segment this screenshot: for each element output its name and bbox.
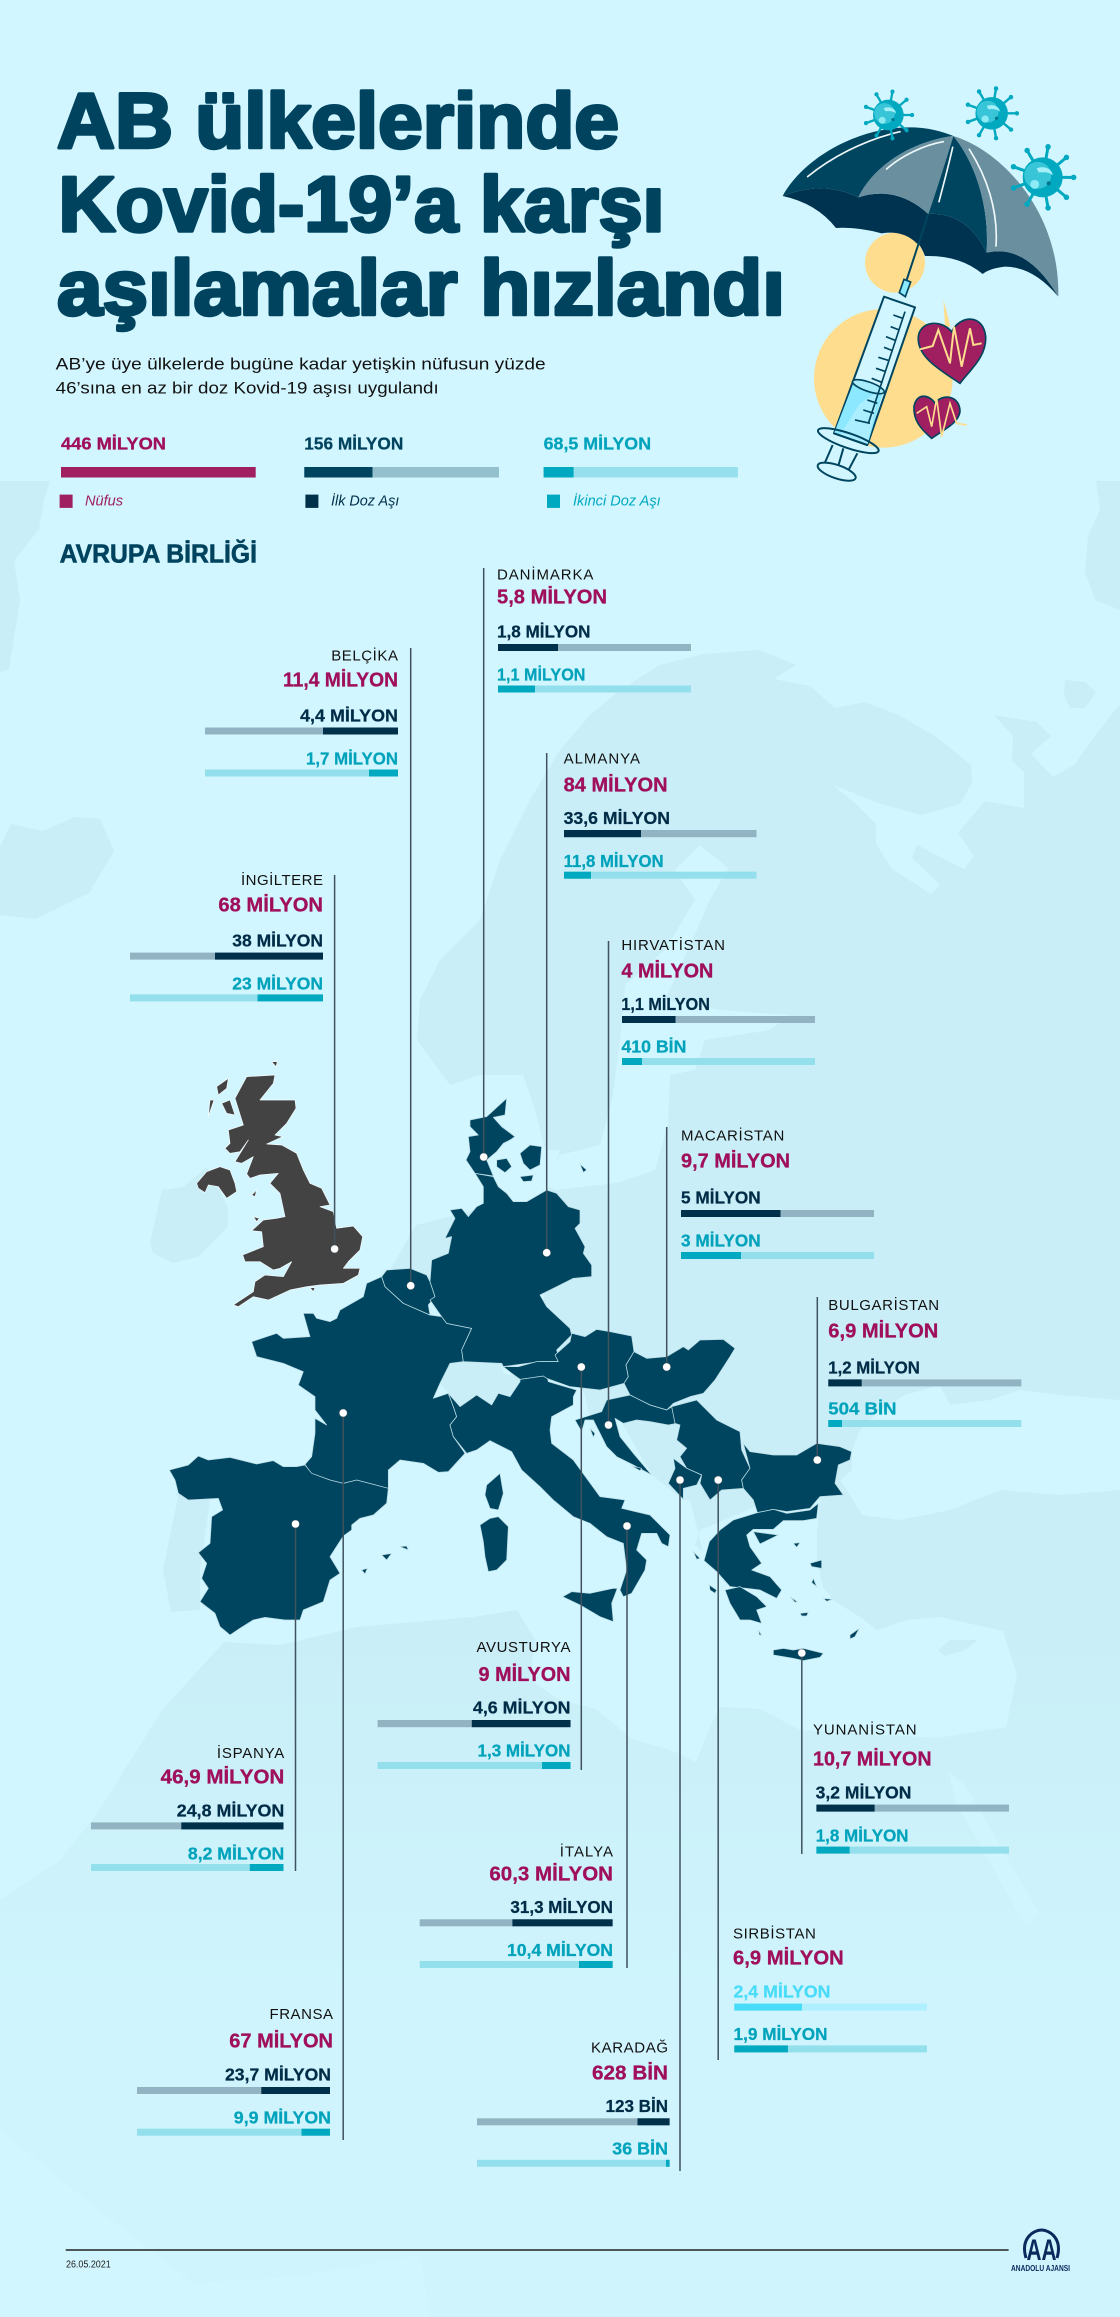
title: Kovid-19’a karşı [58,160,664,248]
population: 9,7 MİLYON [681,1149,790,1172]
panel: ingiltere [130,871,339,1253]
second dose [621,1036,815,1065]
second dose [420,1940,613,1968]
second dose: 504 BİN [828,1398,897,1418]
first dose: 4,4 MİLYON [300,706,398,726]
map: croatia [575,1395,677,1475]
first dose [681,1188,874,1217]
icon: small heart [914,396,967,438]
second dose: 8,2 MİLYON [188,1843,284,1863]
second dose [91,1843,284,1871]
country name: İSPANYA [217,1744,284,1762]
population: 84 MİLYON [564,774,668,796]
country name: ALMANYA [564,750,640,768]
icon: large heart [918,299,986,383]
population: 4 MİLYON [621,959,713,982]
second dose: 36 BİN [612,2139,668,2159]
map: hungary [624,1339,735,1410]
second dose [828,1398,1021,1427]
second dose: 1,7 MİLYON [306,748,398,768]
summary: nüfus [60,434,256,510]
second dose: 410 BİN [621,1036,686,1056]
country name: DANİMARKA [497,566,593,584]
second dose [137,2107,331,2136]
map: serbia [672,1400,750,1500]
second dose: 3 MİLYON [681,1230,761,1250]
second dose [497,664,691,692]
map: greece [693,1503,859,1661]
icon: umbrella [783,127,1058,297]
summary: ikinci doz [544,434,738,510]
second dose: 9,9 MİLYON [234,2107,331,2127]
first dose: 1,1 MİLYON [621,994,710,1014]
population: 6,9 MİLYON [733,1947,844,1970]
population: 10,7 MİLYON [813,1748,932,1771]
first dose: 3,2 MİLYON [816,1782,911,1802]
first dose [621,994,815,1023]
map: germany [430,1173,592,1367]
first dose: 38 MİLYON [232,930,323,950]
logo: anadolu ajansı: ANADOLU AJANSI [1011,2264,1070,2273]
first dose: 24,8 MİLYON [177,1800,284,1820]
subtitle text: 46’sına en az bir doz Kovid-19 aşısı uygulandı [56,378,439,398]
population: 68 MİLYON [218,893,323,916]
summary: ilk doz: İlk Doz Aşı [331,492,399,510]
population: 9 MİLYON [478,1663,570,1686]
second dose [681,1230,874,1259]
second dose: 1,9 MİLYON [734,2024,828,2044]
logo: anadolu ajansı: AA [1026,2234,1056,2267]
second dose [205,748,398,776]
summary: ilk doz [304,434,499,510]
panel: sırbistan [714,1476,927,2060]
panel: karadağ [477,1476,684,2171]
country name: KARADAĞ [591,2040,668,2056]
first dose: 23,7 MİLYON [225,2064,331,2084]
first dose [137,2064,331,2094]
second dose: 1,3 MİLYON [478,1740,570,1760]
second dose [816,1825,1009,1854]
country name: İNGİLTERE [241,871,323,889]
second dose: 1,1 MİLYON [497,664,586,684]
second dose [477,2139,670,2167]
first dose: 123 BİN [606,2096,668,2116]
icon: virus 2 [966,86,1019,140]
title: aşılamalar hızlandı [57,244,785,332]
first dose: 4,6 MİLYON [473,1697,570,1717]
second dose [734,2024,927,2052]
subtitle text: AB’ye üye ülkelerde bugüne kadar yetişkin nüfusun yüzde [56,354,546,374]
population: 67 MİLYON [229,2029,333,2052]
second dose: 10,4 MİLYON [507,1940,613,1960]
first dose [130,930,323,960]
background map: pale world land [0,481,1120,2317]
heading: avrupa birliği: AVRUPA BİRLİĞİ [60,538,257,568]
panel: danimarka [480,566,691,1161]
title [57,76,785,332]
first dose: 1,8 MİLYON [497,622,590,642]
panel: belçika [205,646,415,1290]
first dose: 2,4 MİLYON [734,1981,830,2001]
map: austria [503,1329,634,1390]
panel: ispanya [91,1520,300,1871]
first dose [497,622,691,651]
population: 5,8 MİLYON [497,586,607,608]
first dose: 31,3 MİLYON [510,1897,613,1917]
population: 46,9 MİLYON [161,1765,284,1788]
population: 6,9 MİLYON [828,1319,938,1342]
summary: ikinci doz: 68,5 MİLYON [544,434,651,454]
second dose: 1,8 MİLYON [816,1825,909,1845]
summary: ikinci doz: İkinci Doz Aşı [573,492,661,510]
map: europe countries [169,1062,859,1661]
summary: nüfus: 446 MİLYON [61,434,166,454]
map: italy [448,1375,670,1622]
footer rule [66,2249,1009,2251]
panel: yunanistan [798,1649,1009,1854]
logo: anadolu ajansı [1011,2230,1070,2273]
first dose: 1,2 MİLYON [828,1357,920,1377]
first dose: 33,6 MİLYON [564,808,670,828]
summary: nüfus: Nüfus [85,492,123,510]
panel: almanya [543,750,756,1257]
second dose: 11,8 MİLYON [564,851,664,871]
second dose: 23 MİLYON [232,973,323,993]
country name: AVUSTURYA [476,1639,570,1656]
panel: hırvatistan [604,936,815,1429]
country name: BELÇİKA [331,646,398,664]
first dose [816,1782,1009,1812]
map: united kingdom [197,1062,363,1307]
population: 11,4 MİLYON [283,668,398,692]
panel: italya [420,1522,631,1968]
map: bulgaria [742,1443,852,1513]
panel: fransa [137,1409,347,2140]
country name: İTALYA [560,1842,613,1860]
population: 628 BİN [592,2061,668,2084]
first dose [91,1800,284,1829]
country name: BULGARİSTAN [828,1296,939,1314]
map: france [252,1277,472,1489]
panel: bulgaristan [813,1296,1021,1464]
map: montenegro [668,1458,702,1499]
country name: YUNANİSTAN [813,1720,917,1738]
map: denmark [466,1098,587,1182]
population: 60,3 MİLYON [489,1862,613,1885]
subtitle text [56,354,546,398]
first dose [564,808,756,837]
title: AB ülkelerinde [57,76,619,164]
country name: SIRBİSTAN [733,1924,816,1942]
first dose [477,2096,670,2125]
date: 26.05.2021 [66,2260,111,2270]
icon: virus 1 [864,89,914,141]
panel: avusturya [378,1363,585,1770]
map: belgium [382,1268,435,1315]
panel: macaristan [663,1126,874,1371]
summary: ilk doz: 156 MİLYON [304,434,403,454]
map: switzerland [433,1358,520,1407]
first dose [734,1981,927,2011]
first dose [378,1697,571,1727]
country name: MACARİSTAN [681,1126,784,1144]
icon: syringe [816,279,915,484]
first dose [205,706,398,734]
map: spain [169,1456,408,1635]
icon: virus 3 [1011,144,1076,211]
first dose [828,1357,1021,1386]
second dose [130,973,323,1001]
second dose [378,1740,571,1769]
country name: HIRVATİSTAN [621,936,725,954]
second dose [564,851,756,879]
country name: FRANSA [270,2006,333,2023]
first dose: 5 MİLYON [681,1188,761,1208]
illustration: umbrella and syringe [783,86,1076,484]
first dose [420,1897,613,1926]
